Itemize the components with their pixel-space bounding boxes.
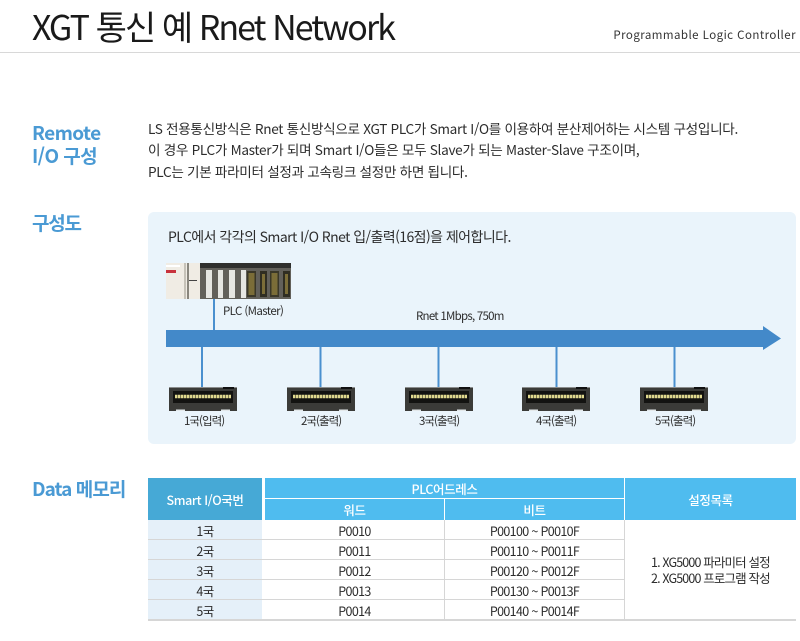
label: station 2: 2국(출력) (301, 413, 341, 429)
header subtitle: Programmable Logic Controller (613, 27, 796, 43)
row 1 station (148, 520, 262, 539)
icon: station 5 module (640, 387, 708, 411)
table header: 워드: 워드 (343, 500, 366, 519)
row 5 station: 5국 (196, 600, 214, 620)
icon: station 1 module (169, 387, 237, 411)
row 3 station: 3국 (196, 560, 214, 580)
table header: 비트: 비트 (523, 500, 546, 519)
row 2 station: 2국 (196, 540, 214, 560)
description text: 이 경우 PLC가 Master가 되며 Smart I/O들은 모두 Slave가 되는 Master-Slave 구조이며, (148, 139, 639, 159)
connector: PLC to bus (213, 299, 215, 330)
description text: LS 전용통신방식은 Rnet 통신방식으로 XGT PLC가 Smart I/O를 이용하여 분산제어하는 시스템 구성입니다. (148, 118, 738, 138)
row 3 station (148, 560, 262, 579)
connector: station 2 (320, 347, 322, 387)
section heading: Remote I/O (32, 119, 101, 169)
table header: Smart I/O 국번: Smart I/O국번 (167, 490, 243, 508)
section heading: Remote I/O: I/O 구성 (32, 142, 97, 169)
row 2 word: P0011 (338, 540, 371, 560)
table header: PLC 어드레스 (265, 478, 624, 498)
setup list: 1. XG5000 파라미터 설정 (651, 552, 770, 571)
row 3 word: P0012 (338, 560, 371, 580)
label: Rnet speed: Rnet 1Mbps, 750m (416, 308, 504, 324)
icon: station 4 module (522, 387, 590, 411)
connector: station 5 (674, 347, 676, 387)
connector: station 1 (201, 347, 203, 387)
row 5 bit: P00140 ~ P0014F (490, 600, 579, 620)
row 5 station (148, 600, 262, 619)
row 3 bit: P00120 ~ P0012F (490, 560, 579, 580)
row 4 station (148, 580, 262, 599)
table header: 워드 (265, 499, 444, 520)
section heading: Remote I/O: Remote (32, 119, 101, 146)
arrow: Rnet bus (166, 326, 781, 350)
setup list (651, 552, 770, 587)
icon: PLC master rack (166, 263, 291, 299)
row 2 bit: P00110 ~ P0011F (490, 540, 579, 560)
label: station 5: 5국(출력) (655, 413, 695, 429)
header divider (0, 52, 800, 53)
table header: 비트 (445, 499, 624, 520)
table header: 설정목록 (625, 478, 796, 520)
row 4 station: 4국 (196, 580, 214, 600)
label: station 1: 1국(입력) (184, 413, 224, 429)
setup list: 2. XG5000 프로그램 작성 (651, 568, 770, 587)
title: XGT 통신 예 Rnet Network (32, 1, 394, 50)
table header: 설정목록: 설정목록 (688, 490, 733, 508)
row 5 word: P0014 (338, 600, 371, 620)
connector: station 3 (438, 347, 440, 387)
connector: station 4 (556, 347, 558, 387)
label: station 4: 4국(출력) (536, 413, 576, 429)
description text: PLC는 기본 파라미터 설정과 고속링크 설정만 하면 됩니다. (148, 160, 468, 180)
row 1 station: 1국 (196, 520, 214, 540)
data memory table (148, 478, 796, 621)
table header: Smart I/O 국번 (148, 478, 262, 520)
label: station 3: 3국(출력) (419, 413, 459, 429)
row 4 word: P0013 (338, 580, 371, 600)
section heading: Data 메모리: Data 메모리 (32, 475, 125, 502)
table header: PLC 어드레스: PLC어드레스 (412, 478, 477, 498)
row 2 station (148, 540, 262, 559)
diagram caption: PLC에서 각각의 Smart I/O Rnet 입/출력(16점)을 제어합니다. (168, 227, 511, 247)
panel: network diagram (148, 212, 796, 444)
label: PLC master: PLC (Master) (223, 303, 283, 319)
row 1 word: P0010 (338, 520, 371, 540)
row 1 bit: P00100 ~ P0010F (490, 520, 579, 540)
icon: station 3 module (405, 387, 473, 411)
row 4 bit: P00130 ~ P0013F (490, 580, 579, 600)
icon: station 2 module (287, 387, 355, 411)
section heading: 구성도: 구성도 (32, 209, 81, 236)
description text (148, 118, 738, 180)
